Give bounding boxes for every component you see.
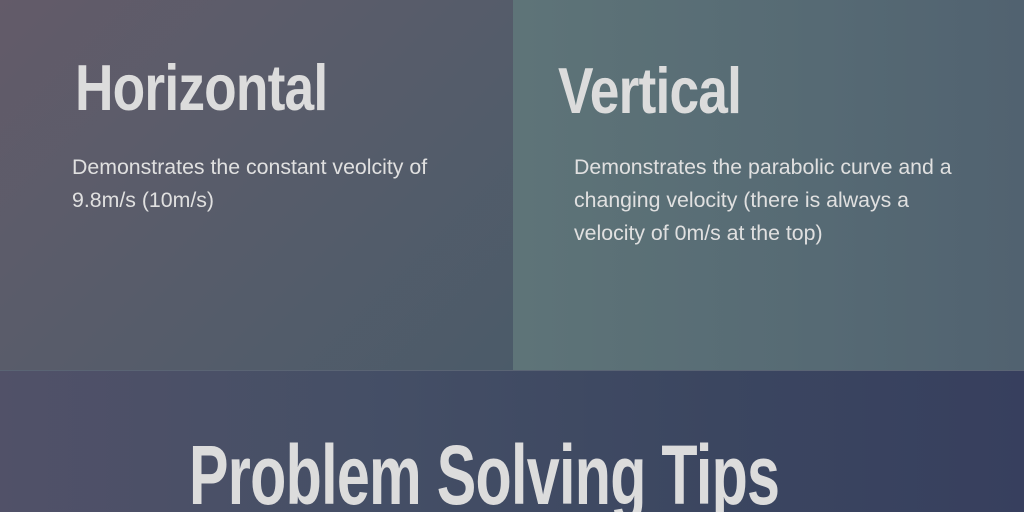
panel: horizontal <box>0 0 513 370</box>
text: horizontal description: 9.8m/s (10m/s) <box>72 188 214 212</box>
text: vertical description: velocity of 0m/s at the top) <box>574 221 823 245</box>
heading: Horizontal: Horizontal <box>75 51 327 124</box>
text: vertical description <box>574 155 952 245</box>
panel: vertical <box>513 0 1024 370</box>
text: horizontal description <box>72 155 428 212</box>
text: vertical description: changing velocity (there is always a <box>574 188 909 212</box>
heading: Vertical: Vertical <box>558 54 741 127</box>
panel: problem solving tips <box>0 370 1024 512</box>
text: horizontal description: Demonstrates the constant veolcity of <box>72 155 427 179</box>
text: vertical description: Demonstrates the parabolic curve and a <box>574 155 952 179</box>
